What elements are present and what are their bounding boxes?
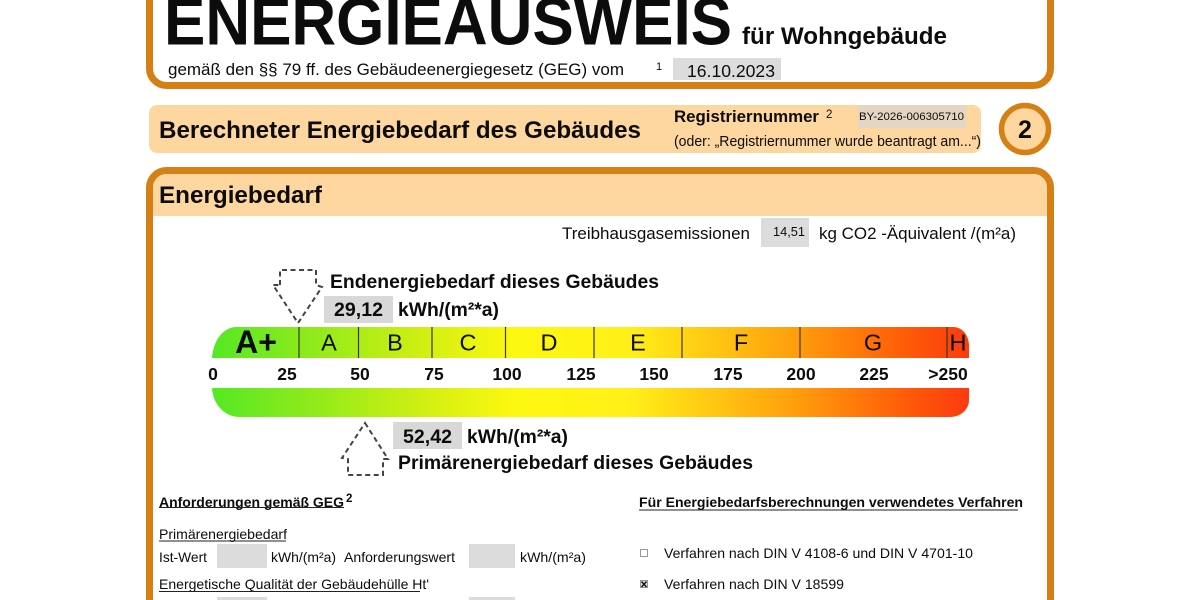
scale bar: energy classes: B <box>387 330 403 356</box>
scale numbers: >250 <box>928 364 968 384</box>
scale bar: energy classes: A+ <box>235 324 277 360</box>
final energy value: kWh/(m²*a) <box>398 299 499 321</box>
calculation method section <box>639 494 1023 592</box>
primary energy value: 52,42 <box>403 426 452 448</box>
scale numbers: 150 <box>639 364 669 384</box>
requirements section: Anforderungen gemäß GEG <box>159 494 344 510</box>
greenhouse gas emissions row: Treibhausgasemissionen <box>562 224 750 243</box>
panel: calculated energy demand banner <box>149 105 981 153</box>
panel header band <box>153 174 1047 216</box>
scale numbers: 225 <box>859 364 889 384</box>
footnote marker 1: 1 <box>656 61 662 73</box>
scale numbers: 25 <box>277 364 297 384</box>
requirements section: kWh/(m²a) <box>520 549 586 565</box>
badge: page number 2: 2 <box>1018 116 1032 144</box>
scale numbers <box>208 364 968 384</box>
scale bar: energy classes: G <box>864 330 882 356</box>
requirements section: Anforderungswert <box>344 549 455 565</box>
requirements section: Primärenergiebedarf <box>159 526 287 542</box>
scale bar: energy classes: D <box>541 330 557 356</box>
registration note: (oder: „Registriernummer wurde beantragt am...“) <box>674 134 981 150</box>
scale bar: energy classes: A <box>321 330 337 356</box>
registration number field: BY-2026-006305710 <box>859 111 964 123</box>
greenhouse gas emissions row: 14,51 <box>773 225 805 239</box>
greenhouse gas emissions row <box>562 218 1016 247</box>
panel: title frame <box>150 0 1050 86</box>
footnote marker 2: 2 <box>826 109 832 121</box>
scale numbers: 100 <box>492 364 522 384</box>
greenhouse gas emissions row: kg CO2 -Äquivalent /(m²a) <box>819 224 1016 243</box>
panel: Energiebedarf <box>150 170 1050 600</box>
primary energy label: Primärenergiebedarf dieses Gebäudes <box>398 452 753 474</box>
final energy label: Endenergiebedarf dieses Gebäudes <box>330 271 659 293</box>
scale numbers: 0 <box>208 364 218 384</box>
requirements section <box>159 493 586 600</box>
scale numbers: 175 <box>713 364 743 384</box>
scale bar: energy classes: H <box>950 330 966 356</box>
calculation method section: Für Energiebedarfsberechnungen verwendetes Verfahren <box>639 494 1023 510</box>
final energy value: 29,12 <box>334 299 383 321</box>
scale numbers: 125 <box>566 364 596 384</box>
scale numbers: 200 <box>786 364 816 384</box>
panel heading: Energiebedarf <box>159 182 323 209</box>
calculation method section: Verfahren nach DIN V 18599 <box>664 576 844 592</box>
final energy value <box>324 296 499 323</box>
registration number field <box>858 105 966 128</box>
requirements section: Ist-Wert <box>159 549 207 565</box>
requirements section: kWh/(m²a) <box>271 549 336 565</box>
registration label: Registriernummer <box>674 108 820 126</box>
calculation method section: Verfahren nach DIN V 4108-6 und DIN V 4701-10 <box>664 545 973 561</box>
primary energy value: kWh/(m²*a) <box>467 426 568 448</box>
scale bar: energy classes <box>212 324 969 360</box>
scale numbers: 50 <box>350 364 370 384</box>
scale numbers: 75 <box>424 364 444 384</box>
scale bar: energy classes: C <box>460 330 477 356</box>
requirements section: Energetische Qualität der Gebäudehülle Ht' <box>159 576 429 592</box>
scale bar: energy classes: F <box>734 330 748 356</box>
legal reference: gemäß den §§ 79 ff. des Gebäudeenergiegesetz (GEG) vom <box>168 60 624 79</box>
banner heading: Berechneter Energiebedarf des Gebäudes <box>159 117 641 144</box>
date field: 16.10.2023 <box>687 61 775 81</box>
requirements section: 2 <box>346 493 352 505</box>
scale bar: primary energy <box>212 388 969 417</box>
arrow: primary energy marker <box>342 423 388 475</box>
scale bar: energy classes: E <box>630 330 646 356</box>
subtitle: für Wohngebäude <box>742 23 947 50</box>
badge: page number 2 <box>1002 106 1048 152</box>
primary energy value <box>393 422 568 449</box>
arrow: final energy marker <box>273 270 322 323</box>
